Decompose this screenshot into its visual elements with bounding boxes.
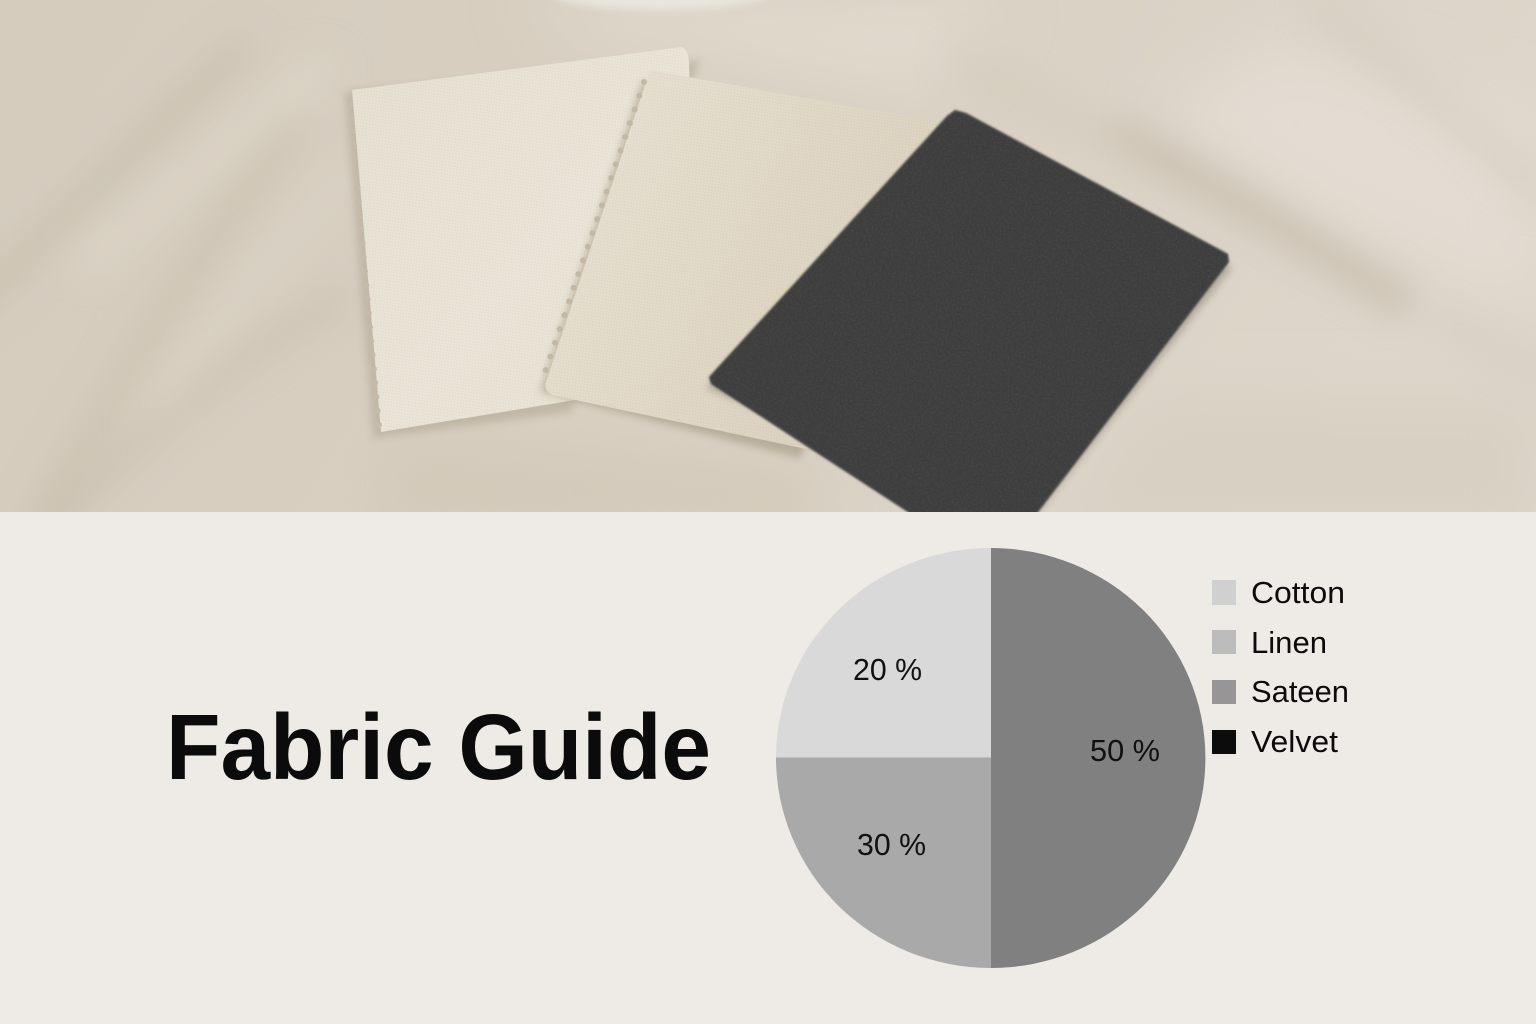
label: 30 %: 30 %: [857, 827, 926, 862]
pinked edge notches: [358, 159, 382, 427]
pinked edge notches: [545, 82, 644, 372]
slice: 50%: [991, 548, 1205, 968]
slice: 30%: [776, 758, 991, 968]
legend: velvet: [1212, 724, 1338, 759]
backdrop folds: [0, 0, 1536, 530]
swatch 2: beige canvas: [540, 70, 940, 458]
legend: linen: [1212, 625, 1327, 660]
legend: velvet: Velvet: [1251, 724, 1338, 759]
title: Fabric Guide: [166, 695, 711, 799]
swatch 3: charcoal velvet: [700, 100, 1240, 520]
legend: sateen: Sateen: [1251, 674, 1349, 709]
legend: linen: Linen: [1251, 625, 1327, 660]
slice: 20%: [776, 548, 991, 758]
photo: fabric swatches on linen: [0, 0, 1536, 530]
linen backdrop: [0, 0, 1536, 512]
legend: [1212, 575, 1349, 759]
label: 20 %: 20 %: [853, 652, 922, 687]
swatch 1: cream linen: [345, 47, 700, 438]
pie chart: [776, 548, 1205, 968]
legend: cotton: Cotton: [1251, 575, 1345, 610]
legend: cotton: [1212, 575, 1345, 610]
label: 50 %: 50 %: [1090, 733, 1160, 768]
